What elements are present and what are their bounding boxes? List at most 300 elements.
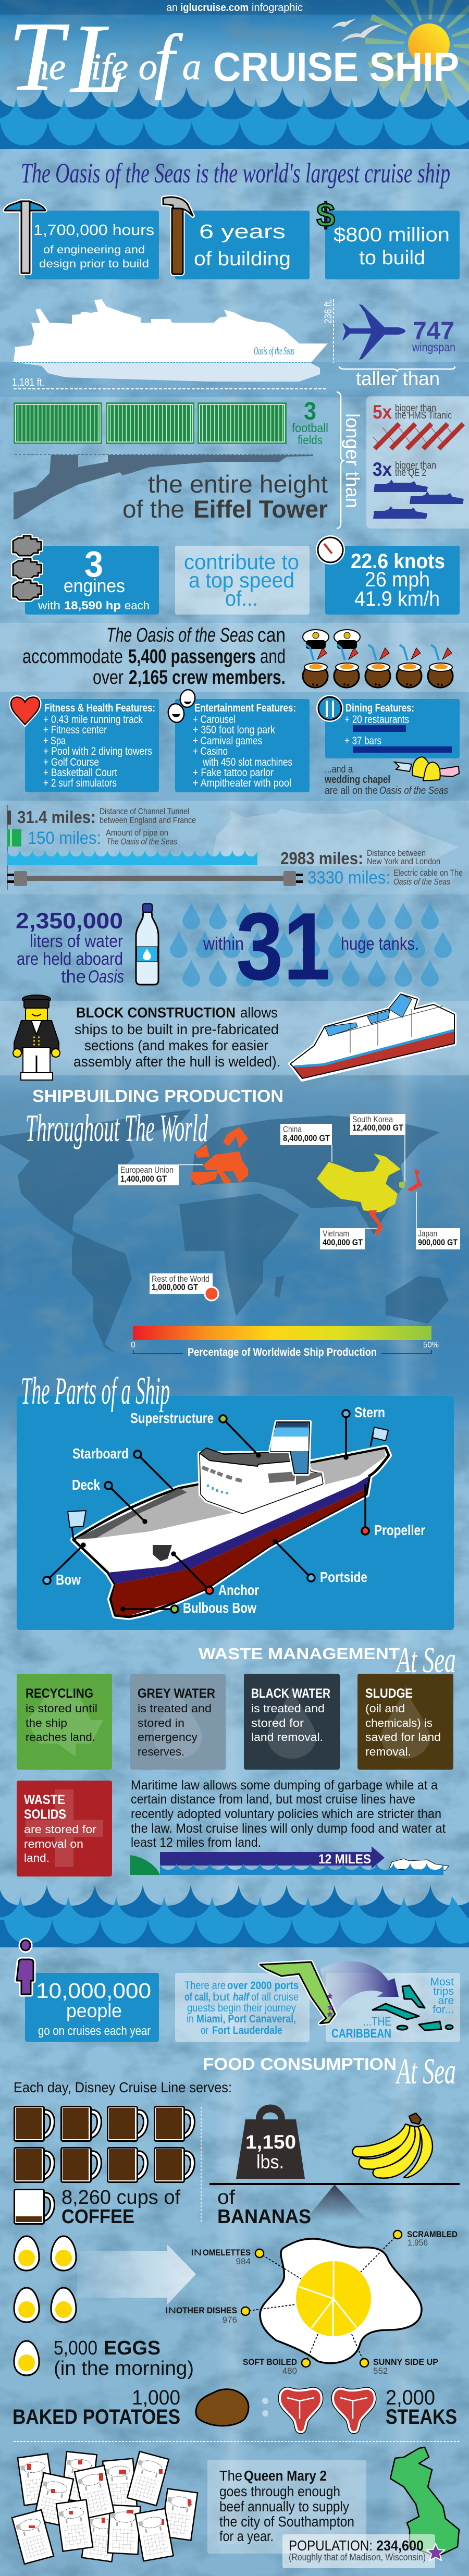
panel: sludge: SLUDGE <box>365 1686 413 1701</box>
panel: queen mary 2 beef: the city of Southampton <box>219 2513 354 2530</box>
bananas caption <box>217 2187 311 2228</box>
food consumption heading <box>203 2052 456 2092</box>
part callout lines <box>47 1414 365 1609</box>
icon: florida <box>260 1962 335 2023</box>
icon: t-square <box>5 201 45 273</box>
tunnel bar: 31.4 miles <box>7 806 196 827</box>
weight <box>236 2105 305 2179</box>
panel: entertainment features: Entertainment Features: <box>194 702 296 714</box>
panel: waste solids <box>17 1781 112 1876</box>
panel: ten million cruisers: people <box>66 2000 122 2021</box>
weight: 1,150 <box>245 2131 296 2153</box>
panel: entertainment features: + 350 foot long park <box>193 724 275 736</box>
icon: fork and knife <box>316 695 343 722</box>
part labels: Bulbous Bow <box>183 1600 256 1616</box>
panel: sludge: saved for land <box>365 1731 441 1744</box>
panel: queen mary 2 beef: Queen Mary 2 <box>244 2468 327 2484</box>
taller than brace <box>339 366 455 389</box>
map: rest of the world: 1,000,000 GT <box>152 1282 199 1292</box>
part labels: Portside <box>320 1569 367 1585</box>
panel: caribbean: are <box>438 1995 454 2007</box>
population callout: 234,600 <box>376 2537 424 2554</box>
icon: caribbean islands <box>373 1985 453 2030</box>
map: vietnam <box>320 1210 383 1249</box>
steaks: 2,000 <box>386 2386 435 2409</box>
population callout: (Roughly that of Madison, Wisconsin) <box>289 2552 426 2562</box>
panel: black water: stored for <box>251 1716 304 1729</box>
block construction text <box>73 1004 280 1070</box>
panel: titanic and QE2 comparison <box>366 396 469 529</box>
fried egg pie chart: SUNNY SIDE UP <box>373 2357 438 2367</box>
panel: queen mary 2 beef: beef annually to supply <box>219 2498 349 2514</box>
map: japan: Japan <box>418 1229 437 1238</box>
population callout: POPULATION: <box>289 2537 373 2554</box>
panel: ports of call: half <box>233 1991 250 2003</box>
part labels: Bow <box>56 1572 81 1588</box>
panel: dining features <box>316 695 460 758</box>
panel: queen mary 2 beef <box>207 2460 366 2554</box>
waste management heading: WASTE MANAGEMENT <box>199 1645 400 1663</box>
coffee caption <box>61 2187 180 2228</box>
fried egg pie chart: SOFT BOILED <box>243 2357 297 2367</box>
panel: black water: BLACK WATER <box>251 1686 330 1701</box>
panel: fitness and health features: + Golf Course <box>43 756 99 768</box>
panel: cost to build: $800 million <box>334 224 450 246</box>
longer than brace: longer than <box>342 413 363 508</box>
panel: years of building: of building <box>194 248 291 270</box>
tanks text: 31 <box>236 892 330 1000</box>
eggs caption: 5,000 <box>54 2337 97 2359</box>
map: south korea: South Korea <box>352 1114 393 1124</box>
panel: engines: with <box>38 599 60 612</box>
icon: drop watermark <box>381 1686 430 1759</box>
panel: fitness and health features: + Fitness center <box>43 724 107 736</box>
panel: waste solids: land. <box>24 1851 50 1864</box>
icon: coffee mugs <box>15 2107 193 2224</box>
title: he <box>30 46 66 88</box>
panel: black water: is treated and <box>251 1702 325 1715</box>
top credit band: an <box>166 2 178 14</box>
bananas caption: of <box>217 2187 235 2209</box>
title: T <box>8 2 69 112</box>
fried egg pie chart <box>165 2229 458 2376</box>
panel: ten million cruisers <box>17 1940 159 2042</box>
wedding chapel text <box>324 764 448 796</box>
liters of water text <box>16 909 124 987</box>
panel: grey water: emergency <box>138 1731 198 1744</box>
block construction text: assembly after the hull is welded). <box>73 1053 280 1070</box>
pipe bar: 150 miles <box>7 828 177 848</box>
maritime law paragraph: Maritime law allows some dumping of garbage while at a <box>131 1778 438 1793</box>
panel: years of building <box>163 197 310 279</box>
cable bar: 3330 miles: Oasis of the Seas <box>393 877 450 887</box>
ship silhouette: Oasis of the Seas <box>254 345 294 357</box>
coffee caption: COFFEE <box>61 2206 134 2228</box>
panel: ports of call: over 2000 ports <box>227 1980 299 1992</box>
part labels: Starboard <box>72 1445 129 1462</box>
maritime law paragraph: the law. Most cruise lines will only dump food and water at <box>131 1821 446 1836</box>
arrow: florida to caribbean <box>320 1961 399 2018</box>
ship illustration <box>68 1422 389 1617</box>
shipbuilding heading: SHIPBUILDING PRODUCTION <box>32 1086 283 1106</box>
liters of water text: liters of water <box>30 931 123 951</box>
map: china <box>280 1124 401 1212</box>
block construction text: BLOCK CONSTRUCTION <box>76 1004 236 1021</box>
panel: cost to build <box>316 196 460 279</box>
panel: entertainment features: with 450 slot machines <box>202 756 292 768</box>
ship silhouette <box>14 299 328 382</box>
wedding chapel text: ...and a <box>325 764 353 775</box>
eggs caption: (in the morning) <box>54 2358 194 2379</box>
football fields: football <box>292 421 328 435</box>
world map <box>0 1109 449 1353</box>
panel: caribbean: for... <box>433 2004 454 2016</box>
heading script: the parts of a ship: The Parts of a Ship <box>21 1370 170 1413</box>
panel: grey water <box>130 1674 226 1770</box>
panel: sludge: chemicals) is <box>365 1716 433 1729</box>
panel: ten million cruisers: 10,000,000 <box>36 1979 151 2003</box>
part labels <box>56 1404 425 1616</box>
panel: fitness and health features: + Pool with 2 diving towers <box>43 745 152 757</box>
fried egg pie chart: OTHER DISHES <box>176 2305 237 2315</box>
ship height and length dimensions: 236 ft. <box>323 299 334 324</box>
fried egg pie chart: 976 <box>223 2315 237 2325</box>
part labels: Superstructure <box>130 1410 214 1426</box>
part labels: Deck <box>72 1477 100 1493</box>
icon: eggs <box>14 2236 76 2375</box>
panel: caribbean: Most <box>430 1976 454 1988</box>
panel: contribute to a top speed <box>175 546 310 615</box>
tunnel bar: 31.4 miles: 31.4 miles: <box>17 807 96 827</box>
title: ife <box>91 46 128 88</box>
maritime law paragraph: certain distance from land, but most cruise lines have <box>131 1792 415 1807</box>
panel: engines <box>13 536 159 615</box>
panel: caribbean: trips <box>433 1985 454 1997</box>
eggs caption <box>54 2337 194 2379</box>
panel: titanic and QE2 comparison: 3x <box>373 459 392 480</box>
bananas <box>352 2113 433 2178</box>
title: f <box>154 20 183 101</box>
passengers and crew text: accommodate <box>22 646 123 668</box>
panel: waste solids: are stored for <box>24 1823 96 1836</box>
maritime law paragraph <box>131 1778 446 1850</box>
panel: queen mary 2 beef: for a year. <box>219 2528 274 2544</box>
panel: grey water: stored in <box>138 1716 184 1729</box>
icon: crew hats <box>303 630 360 649</box>
panel: fitness and health features: + Spa <box>43 735 66 747</box>
panel: top speed: 41.9 km/h <box>354 587 440 610</box>
panel: ports of call: There are <box>184 1980 226 1992</box>
map: south korea: 12,400,000 GT <box>352 1123 404 1133</box>
fried egg pie chart: 552 <box>373 2366 388 2376</box>
bananas caption: BANANAS <box>217 2206 311 2228</box>
taller than brace: taller than <box>356 368 440 389</box>
panel: titanic and QE2 comparison: the HMS Titanic <box>395 410 452 421</box>
icon: cross watermark <box>26 1789 103 1867</box>
panel: contribute to a top speed: of... <box>225 586 258 610</box>
title: a <box>182 46 201 88</box>
panel: queen mary 2 beef: goes through enough <box>219 2483 340 2499</box>
icon: united kingdom map <box>390 2447 459 2557</box>
liters of water text: the <box>61 967 86 987</box>
production percentage scale: 0 <box>131 1341 135 1350</box>
icon: balance with weight and bananas <box>209 2105 460 2221</box>
section bands <box>0 362 469 1075</box>
panel: grey water: reserves. <box>138 1745 184 1758</box>
panel: fitness and health features: + 2 surf simulators <box>43 777 117 789</box>
panel: caribbean <box>320 1961 460 2042</box>
tunnel bar: 31.4 miles: between England and France <box>100 815 196 825</box>
passengers and crew text: over <box>93 667 124 689</box>
ship height and length dimensions: 1,181 ft. <box>12 377 44 388</box>
tunnel bar: 31.4 miles: Distance of Channel Tunnel <box>100 806 189 816</box>
top credit band: infographic <box>252 2 303 14</box>
panel: entertainment features <box>167 688 310 792</box>
icon: speedometer <box>316 535 345 565</box>
panel: fitness and health features: Fitness & Health Features: <box>44 702 155 714</box>
12 miles diagram <box>130 1846 449 1875</box>
map: south korea <box>350 1114 405 1188</box>
panel: ports of call: or <box>201 2025 208 2037</box>
funnel <box>270 1422 310 1474</box>
wedding chapel text: are all on the <box>325 785 378 796</box>
fried egg pie chart: OMELETTES <box>203 2248 251 2258</box>
production percentage scale: 50% <box>423 1341 439 1350</box>
panel: ports of call: of call, <box>184 1991 211 2003</box>
football fields: 3 <box>304 398 316 425</box>
distance chart <box>7 805 463 890</box>
panel: caribbean: ...THE <box>363 2015 391 2029</box>
wedding chapel text: wedding chapel <box>324 774 390 786</box>
panel: ports of call <box>175 1973 310 2042</box>
747 wingspan label: wingspan <box>412 340 455 354</box>
panel: titanic and QE2 comparison: bigger than <box>395 403 436 414</box>
panel: entertainment features: + Casino <box>193 745 228 757</box>
panel: entertainment features: + Ampitheater with pool <box>193 777 291 789</box>
panel: engines: 18,590 hp <box>64 599 121 612</box>
panel: entertainment features: + Fake tattoo parlor <box>193 767 274 779</box>
panel: fitness and health features: + 0.43 mile running track <box>43 714 143 726</box>
panel: ports of call: of all cruise <box>251 1991 299 2003</box>
title: CRUISE SHIP <box>213 44 459 90</box>
icon: dollar sign: $ <box>316 196 335 234</box>
icon: potato <box>196 2389 249 2426</box>
panel: engines: engines <box>64 575 125 596</box>
icon: person <box>17 1940 33 1994</box>
water bar: 2983 miles: 2983 miles: <box>280 849 363 868</box>
panel: grey water: GREY WATER <box>138 1686 215 1701</box>
map: china: 8,400,000 GT <box>283 1133 330 1143</box>
longer than brace <box>337 392 363 529</box>
panel: sludge: removal. <box>365 1745 411 1758</box>
fried egg pie chart: SCRAMBLED <box>407 2229 458 2239</box>
icon: wedding bells <box>394 757 459 781</box>
panel: parts of a ship <box>17 1370 454 1630</box>
passengers and crew text: The Oasis of the Seas <box>106 624 254 646</box>
panel: top speed: 22.6 knots <box>351 550 445 573</box>
tanks text: within <box>203 934 244 954</box>
cable bar: 3330 miles: 3330 miles: <box>307 868 390 888</box>
fried egg pie chart: 984 <box>236 2256 251 2266</box>
block construction text: sections (and makes for easier <box>84 1037 268 1053</box>
panel: fitness and health features <box>11 697 159 792</box>
pipe bar: 150 miles: 150 miles: <box>28 828 101 848</box>
map: rest of the world <box>150 1273 218 1301</box>
panel: dining features: + 37 bars <box>344 735 381 747</box>
12 miles diagram: 12 MILES <box>318 1852 371 1867</box>
passengers and crew text: 5,400 passengers <box>128 646 256 668</box>
panel: titanic and QE2 comparison: the QE 2 <box>395 468 426 479</box>
big arrow: eggs to pie <box>77 2244 196 2304</box>
waves <box>0 87 469 149</box>
panel: sludge <box>357 1674 453 1770</box>
panel: recycling: RECYCLING <box>26 1686 93 1701</box>
water drops backdrop <box>170 902 452 987</box>
fried egg pie chart: 480 <box>282 2366 297 2376</box>
map: rest of the world: Rest of the World <box>152 1274 209 1284</box>
panel: cost to build: to build <box>359 247 425 269</box>
map: japan <box>407 1169 460 1249</box>
top credit band: iglucruise.com <box>180 2 249 14</box>
part labels: Propeller <box>374 1522 425 1538</box>
panel: ports of call: in <box>187 2013 194 2025</box>
map: european union: 1,400,000 GT <box>120 1174 167 1184</box>
passengers and crew text: and <box>260 646 286 668</box>
eiffel tower caption <box>122 470 328 523</box>
icon: heart <box>11 697 40 725</box>
part labels: Stern <box>354 1404 385 1420</box>
icon: water bottle <box>136 904 158 985</box>
passengers and crew text <box>22 624 286 689</box>
panel: recycling: is stored until <box>26 1702 97 1715</box>
title: o <box>139 46 157 88</box>
panel: engines: 3 <box>84 544 103 584</box>
wedding chapel text: Oasis of the Seas <box>379 785 448 796</box>
baked potatoes <box>13 2386 249 2428</box>
ghost ship silhouette <box>211 809 459 866</box>
panel: sludge: (oil and <box>365 1702 405 1715</box>
icon: lego ship <box>290 994 454 1080</box>
panel: entertainment features: + Carnival games <box>193 735 262 747</box>
water bar: 2983 miles: Distance between <box>367 848 426 858</box>
icon: coconut drinks <box>303 645 453 688</box>
pipe bar: 150 miles: Amount of pipe on <box>106 828 168 838</box>
panel: grey water: is treated and <box>138 1702 212 1715</box>
panel: fitness and health features: + Basketball Court <box>43 767 117 779</box>
icon: lego captain <box>13 995 60 1080</box>
baked potatoes: 1,000 <box>132 2386 180 2409</box>
icon: engines <box>13 536 41 600</box>
panel: waste solids: removal on <box>24 1837 83 1850</box>
panel: dining features: Dining Features: <box>345 702 414 714</box>
tanks text <box>203 892 419 1000</box>
map: european union <box>118 1127 248 1185</box>
icon: hammer <box>163 197 193 274</box>
weight: lbs. <box>256 2151 284 2173</box>
waves divider <box>0 1885 469 1947</box>
part labels: Anchor <box>218 1582 259 1598</box>
liters of water text: are held aboard <box>17 949 123 969</box>
icon: seagulls <box>331 19 384 43</box>
panel: waste solids: WASTE <box>24 1793 65 1807</box>
panel: top speed <box>316 535 460 615</box>
panel: recycling: reaches land. <box>26 1731 95 1744</box>
block construction text: ships to be built in pre-fabricated <box>75 1021 279 1037</box>
panel: titanic and QE2 comparison: bigger than <box>395 460 436 471</box>
passengers and crew text: can <box>257 624 286 646</box>
superstructure <box>200 1453 323 1514</box>
map: vietnam: 400,000 GT <box>323 1237 363 1247</box>
eiffel tower silhouette <box>14 455 314 520</box>
eiffel tower caption: of the <box>122 495 184 523</box>
panel: ports of call: but <box>213 1991 230 2003</box>
fried egg pie chart: 1,956 <box>408 2238 428 2248</box>
colon dots <box>262 2398 268 2416</box>
panel: black water <box>244 1674 340 1770</box>
water bar: 2983 miles <box>7 848 440 868</box>
icon: beef cut calendars <box>12 2451 198 2564</box>
football fields: fields <box>298 433 323 447</box>
747 wingspan label: 747 <box>413 317 454 345</box>
map: european union: European Union <box>120 1165 174 1175</box>
panel: top speed: 26 mph <box>365 568 430 591</box>
water bar: 2983 miles: New York and London <box>367 856 440 866</box>
passengers and crew text: 2,165 crew members. <box>129 667 286 689</box>
icon: blue QE2 ships <box>373 480 464 519</box>
icon: theatre masks <box>167 688 196 724</box>
disney intro: Each day, Disney Cruise Line serves: <box>14 2079 232 2095</box>
maritime law paragraph: recently adopted voluntary policies which are stricter than <box>131 1807 441 1821</box>
heading script: throughout the world: Throughout The World <box>26 1107 208 1150</box>
panel: engineering hours: design prior to build <box>39 258 149 270</box>
fried egg pie chart: IN <box>191 2248 202 2258</box>
eiffel tower caption: the entire height <box>148 470 328 498</box>
icon: southampton star <box>427 2544 445 2560</box>
panel: ports of call: guests begin their journey <box>187 2002 296 2014</box>
top credit band <box>0 0 469 15</box>
ship height and length dimensions <box>12 299 334 389</box>
liters of water text: Oasis <box>88 967 124 987</box>
map: vietnam: Vietnam <box>323 1229 349 1238</box>
icon: 747 airplane <box>342 304 405 360</box>
panel: engineering hours: 1,700,000 hours <box>33 222 154 239</box>
eiffel tower caption: Eiffel Tower <box>193 495 328 523</box>
flags <box>70 1431 374 1540</box>
production percentage scale: Percentage of Worldwide Ship Production <box>188 1346 377 1358</box>
panel: engines: each <box>125 599 150 612</box>
baked potatoes: BAKED POTATOES <box>13 2406 180 2428</box>
icon: red titanic ships <box>373 424 463 449</box>
map: china: China <box>283 1124 302 1134</box>
icon: drop watermark <box>267 1686 316 1759</box>
icon: drop watermark <box>153 1686 202 1759</box>
panel: ten million cruisers: go on cruises each year <box>38 2024 151 2038</box>
panel: recycling <box>17 1674 112 1770</box>
pipe bar: 150 miles: The Oasis of the Seas <box>106 837 177 847</box>
fried egg pie chart: IN <box>165 2305 176 2315</box>
panel: entertainment features: + Carousel <box>193 714 236 726</box>
panel: ports of call: Fort Lauderdale <box>212 2025 282 2037</box>
map: japan: 900,000 GT <box>418 1237 458 1247</box>
part callout dots <box>43 1410 369 1613</box>
food consumption heading: FOOD CONSUMPTION <box>203 2055 397 2074</box>
panel: queen mary 2 beef: The <box>219 2468 242 2484</box>
panel: waste solids: SOLIDS <box>24 1807 66 1822</box>
waste management heading <box>199 1640 456 1680</box>
maritime law paragraph: least 12 miles from land. <box>131 1835 261 1850</box>
cable bar: 3330 miles <box>7 868 463 888</box>
football fields <box>14 398 328 447</box>
